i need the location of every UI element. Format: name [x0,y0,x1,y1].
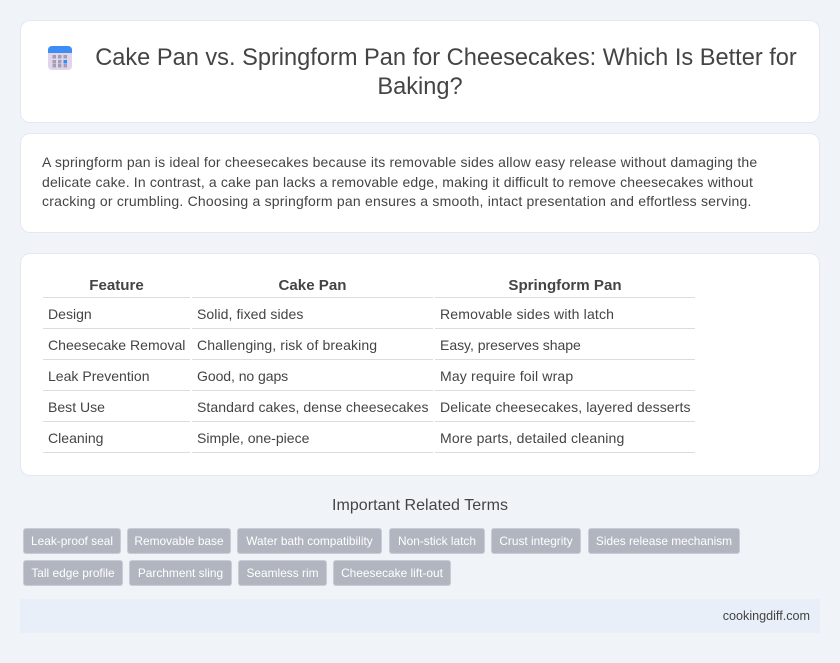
table rules and cells: Removable sides with latch [440,306,614,322]
title [95,44,797,100]
footer source text: cookingdiff.com [723,609,810,623]
table rules and cells: May require foil wrap [440,368,573,384]
table rules and cells: Easy, preserves shape [440,337,581,353]
table rules and cells: Standard cakes, dense cheesecakes [197,399,429,415]
related term tags: Leak-proof seal [31,534,113,548]
icon: calendar [48,46,72,70]
table rules and cells: Good, no gaps [197,368,288,384]
title: Cake Pan vs. Springform Pan for Cheesecakes: Which Is Better for [95,44,797,70]
summary text: cracking or crumbling. Choosing a springform pan ensures a smooth, intact presentation and effortless serving. [42,193,752,209]
panel: title header [20,20,820,123]
table rules and cells: More parts, detailed cleaning [440,430,624,446]
table rules and cells: Design [48,306,92,322]
related term tags: Removable base [134,534,224,548]
summary text: A springform pan is ideal for cheesecakes because its removable sides allow easy release without damaging the [42,154,757,170]
summary text [42,154,757,209]
footer [20,599,820,633]
related term tags [23,528,740,586]
heading: related terms: Important Related Terms [332,496,508,514]
related term tags: Non-stick latch [398,534,476,548]
related term tags: Seamless rim [246,566,319,580]
summary text: delicate cake. In contrast, a cake pan lacks a removable edge, making it difficult to remove cheesecakes without [42,174,753,190]
table rules and cells: Solid, fixed sides [197,306,304,322]
related term tags: Cheesecake lift-out [341,566,443,580]
related term tags: Crust integrity [499,534,573,548]
table rules and cells: Cheesecake Removal [48,337,185,353]
table rules and cells: Challenging, risk of breaking [197,337,377,353]
related term tags: Sides release mechanism [596,534,732,548]
table rules and cells: Cake Pan [279,277,346,294]
table rules and cells: Feature [89,277,144,294]
table rules and cells: Springform Pan [508,277,622,294]
panel: comparison table [20,253,820,476]
table rules and cells: Leak Prevention [48,368,150,384]
related term tags: Parchment sling [138,566,223,580]
related term tags: Tall edge profile [31,566,115,580]
table rules and cells: Simple, one-piece [197,430,309,446]
table rules and cells: Best Use [48,399,105,415]
title: Baking? [377,74,463,100]
table rules and cells: Delicate cheesecakes, layered desserts [440,399,691,415]
panel: summary [20,133,820,233]
table rules and cells: Cleaning [48,430,103,446]
related term tags: Water bath compatibility [246,534,373,548]
